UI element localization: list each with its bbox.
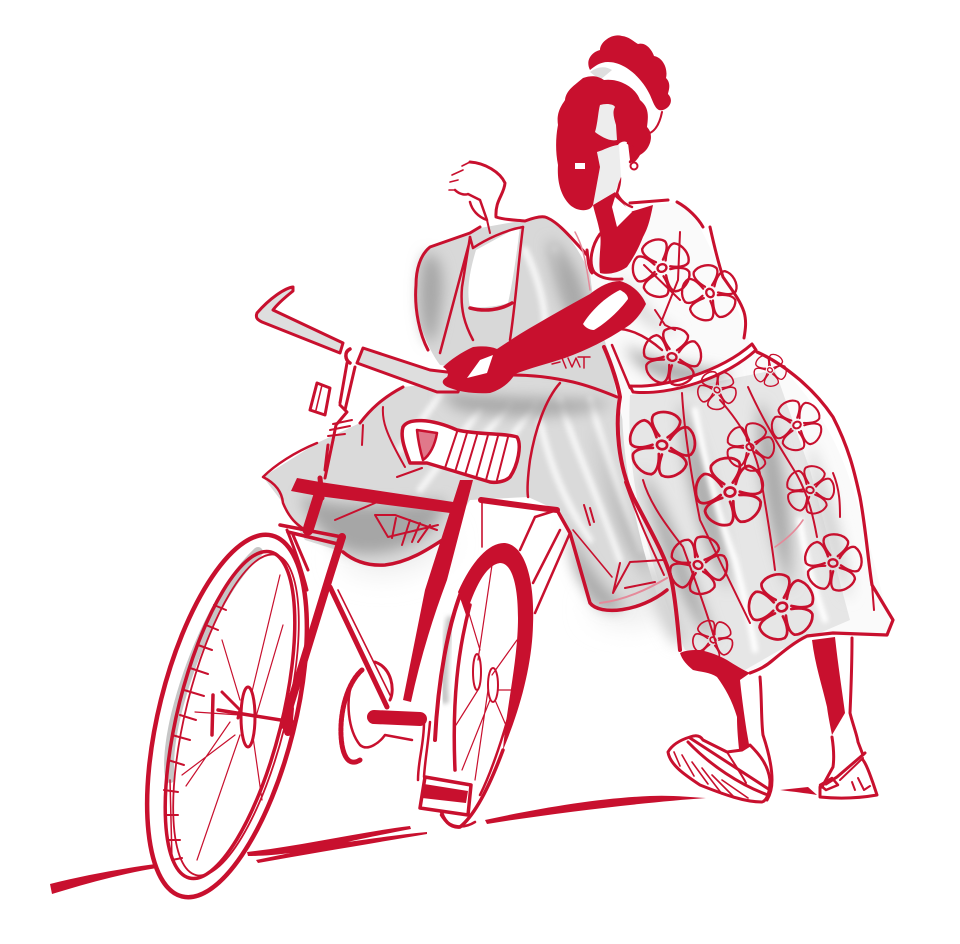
eye window	[595, 104, 617, 140]
ground shadow lines	[50, 787, 817, 894]
handwritten scribble on the cloth	[552, 357, 590, 368]
saddle	[402, 421, 519, 482]
white chest patch	[468, 226, 520, 307]
soft cast shadows	[340, 530, 680, 624]
skirt fold lines	[643, 387, 874, 647]
grey shading: dress folds	[590, 202, 892, 672]
chain ring and crank	[341, 662, 430, 780]
front wheel	[116, 519, 338, 913]
frame tubes	[280, 478, 570, 725]
lower hair and face shadow	[556, 76, 651, 210]
neck and chest	[593, 192, 653, 274]
shoe and sandal	[668, 736, 877, 802]
pedal	[420, 777, 475, 826]
legs	[680, 637, 863, 800]
woman head, hair and neck	[556, 35, 671, 274]
grey shading: carried figure and cloth bundle	[263, 217, 670, 611]
waist sash	[630, 344, 756, 393]
rear wheel	[435, 543, 533, 827]
dress top outline	[630, 200, 746, 338]
dress	[587, 200, 893, 673]
handlebar	[256, 287, 464, 478]
floral pattern	[621, 230, 868, 671]
shoulder and collar lines	[416, 227, 480, 350]
top hair bun	[588, 35, 671, 110]
carried figure	[416, 162, 617, 397]
cloth bundle outline	[263, 383, 667, 610]
woman arm and hand	[443, 281, 646, 393]
raised head	[470, 162, 587, 255]
ear and earring	[628, 143, 634, 162]
skirt outline	[750, 352, 893, 673]
face skin	[593, 145, 621, 205]
headband shading	[590, 67, 612, 80]
bicycle	[116, 287, 570, 913]
